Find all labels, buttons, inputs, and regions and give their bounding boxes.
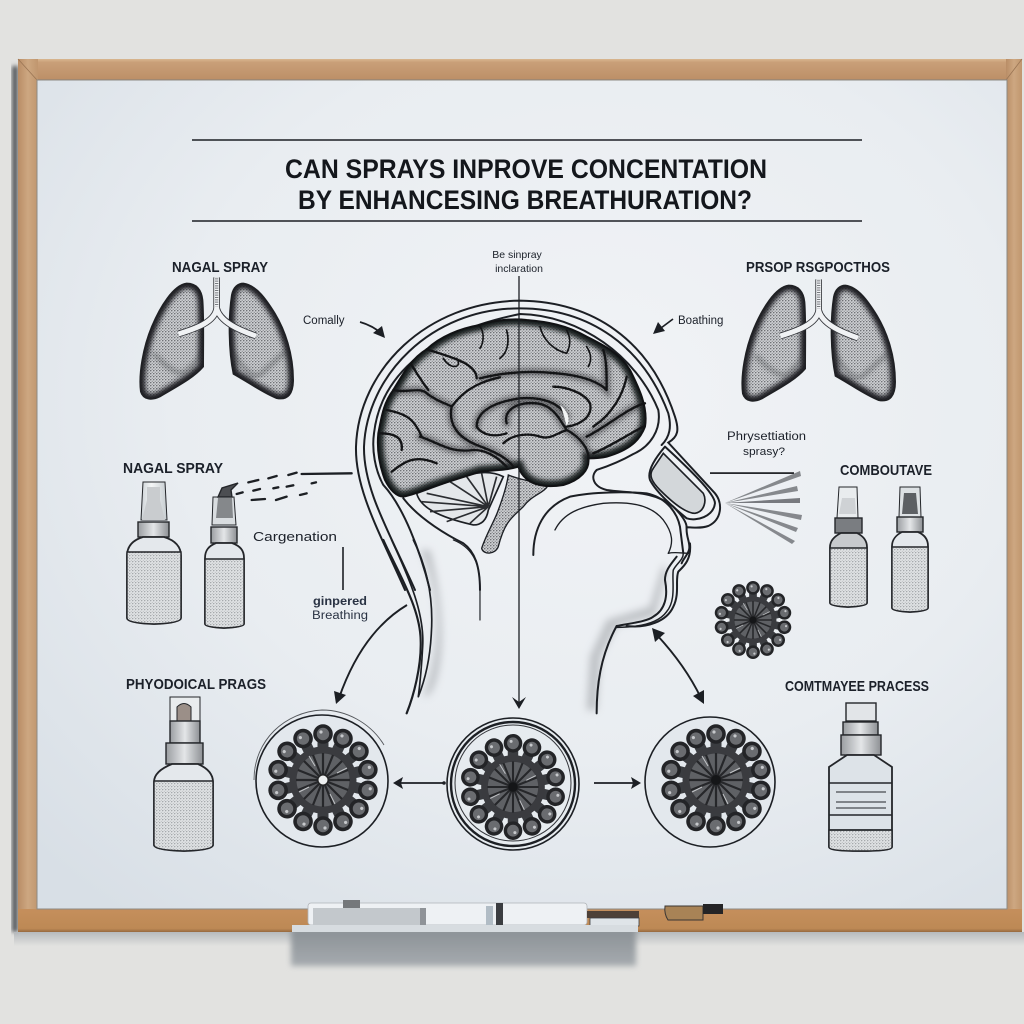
brain illustration (378, 319, 646, 553)
annotation: impaired breathing: ginpered (313, 596, 367, 608)
cerebrum (378, 319, 646, 497)
frame left shadow (12, 66, 18, 932)
frame bottom shadow (14, 932, 1024, 946)
top centre label (492, 249, 543, 275)
label: nasal spray left: NAGAL SPRAY (123, 460, 223, 477)
spray dashes (237, 473, 352, 500)
annotation: physiological spray (727, 431, 806, 458)
icon: spray bottle left 2 (205, 483, 244, 628)
icon: lungs right (742, 279, 895, 401)
top centre label: inclaration (495, 263, 543, 275)
centre line with arrow (512, 276, 526, 709)
annotation: comally with arrow: Comally (303, 315, 345, 327)
annotation: congestion: Cargenation (253, 529, 337, 544)
tray shadow (291, 928, 636, 966)
annotation: impaired breathing: Breathing (312, 610, 368, 622)
title block: BY ENHANCESING BREATHURATION? (298, 185, 752, 215)
neck lines (383, 540, 690, 713)
icon: spray bottle right 1 (830, 487, 867, 607)
arrow: curved left (334, 605, 407, 704)
annotation: physiological spray: Phrysettiation (727, 431, 806, 443)
annotation: breathing with arrow: Boathing (678, 315, 723, 327)
icon: small virus (715, 582, 791, 658)
title block (192, 140, 862, 221)
virus circle left (254, 710, 388, 847)
nose cavity (651, 453, 705, 513)
icon: spray bottle left 1 (127, 482, 181, 624)
annotation: breathing with arrow (653, 315, 723, 334)
label: top right: PRSOP RSGPOCTHOS (746, 259, 890, 276)
arrow: right (594, 777, 641, 789)
annotation: comally with arrow (303, 315, 385, 338)
head outline (356, 301, 720, 590)
label: comparative process: COMTMAYEE PRACESS (785, 678, 929, 695)
arrow: left (393, 777, 446, 789)
virus circle centre (447, 718, 579, 850)
brain stem (482, 475, 547, 553)
label: physiological process: PHYODOICAL PRAGS (126, 676, 266, 693)
annotation: physiological spray: sprasy? (743, 446, 785, 458)
cerebellum (417, 473, 503, 525)
label: nasal spray top left: NAGAL SPRAY (172, 259, 268, 276)
icon: spray bottle bottom left (154, 697, 213, 851)
top centre label: Be sinpray (492, 249, 543, 261)
label: consecutive right: COMBOUTAVE (840, 462, 932, 479)
icon: bottle bottom right (829, 703, 892, 851)
title block: CAN SPRAYS INPROVE CONCENTATION (285, 154, 767, 184)
marker tray (292, 900, 723, 932)
icon: lungs left (140, 277, 293, 399)
arrow: curved double right (652, 628, 704, 704)
head shading (420, 550, 667, 710)
annotation: impaired breathing (312, 547, 368, 622)
icon: spray bottle right 2 (892, 487, 928, 612)
virus circle right (645, 717, 775, 847)
spray plume from nose (710, 471, 802, 544)
